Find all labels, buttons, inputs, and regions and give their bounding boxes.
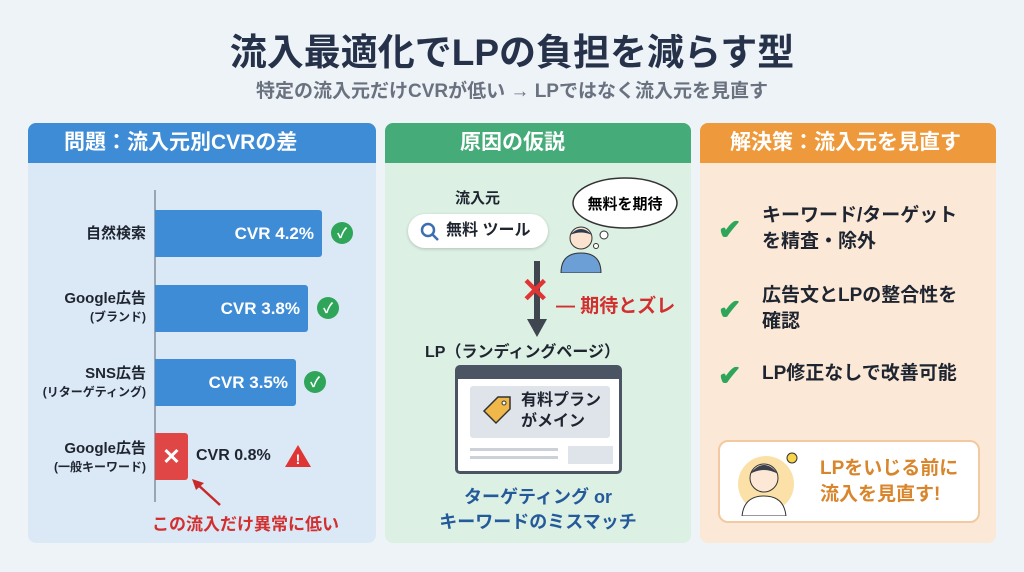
arrow — [192, 479, 221, 506]
item 2: 広告文とLPの整合性を — [762, 285, 957, 306]
item 3: ✔ — [718, 360, 741, 391]
heading: cause: 原因の仮説 — [460, 131, 565, 154]
callout text: この流入だけ異常に低い — [152, 515, 339, 534]
item 1: ✔ — [718, 214, 741, 245]
conclusion text: ターゲティング or — [464, 487, 612, 507]
title: 流入最適化でLPの負担を減らす型 — [230, 32, 794, 73]
item 2 — [718, 284, 957, 332]
heading: problem — [28, 123, 376, 163]
callout box: LPをいじる前に — [820, 458, 958, 479]
label: Google brand: Google広告 — [64, 290, 146, 307]
bar: 4.2: CVR 4.2% — [235, 224, 314, 243]
search pill: 無料 ツール — [446, 222, 530, 239]
icon: warning: ! — [296, 451, 300, 467]
label: SNS: (リターゲティング) — [43, 385, 146, 399]
browser window: 有料プラン — [521, 392, 601, 409]
conclusion text: キーワードのミスマッチ — [439, 512, 637, 532]
browser window — [455, 365, 622, 474]
bar: 0.8: ✕ — [162, 444, 181, 469]
icon: check: ✓ — [323, 300, 333, 316]
heading: cause — [385, 123, 691, 163]
icon: warning — [285, 445, 311, 467]
callout box: 流入を見直す! — [820, 484, 940, 505]
label: Google brand: (ブランド) — [90, 310, 146, 324]
thought cloud — [572, 177, 678, 249]
label: 期待とズレ: — 期待とズレ — [556, 296, 675, 317]
item 1: を精査・除外 — [762, 231, 876, 252]
bar: 3.8 — [155, 285, 308, 332]
arrow down — [527, 261, 547, 337]
label: LP: LP（ランディングページ） — [425, 344, 620, 361]
bar chart: CVR 0.8% — [196, 447, 271, 464]
subtitle: 特定の流入元だけCVRが低い → LPではなく流入元を見直す — [256, 81, 768, 102]
panel: problem — [28, 123, 376, 543]
label: SNS — [43, 365, 146, 399]
bar: 0.8 — [155, 433, 188, 480]
browser window: がメイン — [521, 413, 585, 430]
bar: 3.5 — [155, 359, 296, 406]
label: Google general: Google広告 — [64, 440, 146, 457]
label: Google brand — [64, 290, 146, 324]
cause diagram — [406, 177, 678, 532]
item 3: LP修正なしで改善可能 — [762, 363, 957, 384]
bar chart — [43, 190, 353, 534]
panel: cause — [385, 123, 691, 543]
callout box — [718, 440, 980, 523]
icon: check: ✓ — [310, 374, 320, 390]
heading: solution: 解決策：流入元を見直す — [730, 131, 961, 154]
icon: person with bulb — [738, 452, 798, 516]
heading: problem: 問題：流入元別CVRの差 — [64, 131, 297, 154]
icon: person — [560, 226, 602, 273]
icon: check — [304, 371, 326, 393]
icon: check — [317, 297, 339, 319]
item 2: ✔ — [718, 294, 741, 325]
item 1 — [718, 204, 957, 252]
icon: price tag — [483, 396, 511, 424]
bar: 4.2 — [155, 210, 322, 257]
conclusion text — [439, 487, 637, 532]
bar: 3.5: CVR 3.5% — [209, 373, 288, 392]
panel: solution — [700, 123, 996, 543]
item 2: 確認 — [762, 311, 800, 332]
item 1: キーワード/ターゲット — [762, 205, 957, 226]
label: 流入元: 流入元 — [455, 190, 500, 207]
item 3 — [718, 360, 957, 391]
icon: red X: ✕ — [521, 272, 550, 310]
bar: 3.8: CVR 3.8% — [221, 299, 300, 318]
label: Google general — [54, 440, 146, 474]
label: Google general: (一般キーワード) — [54, 460, 146, 474]
icon: check — [331, 222, 353, 244]
icon: check: ✓ — [337, 225, 347, 241]
search pill — [408, 214, 548, 248]
label: SNS: SNS広告 — [85, 365, 146, 382]
heading: solution — [700, 123, 996, 163]
thought cloud: 無料を期待 — [587, 195, 663, 213]
label: 自然検索: 自然検索 — [86, 225, 146, 242]
